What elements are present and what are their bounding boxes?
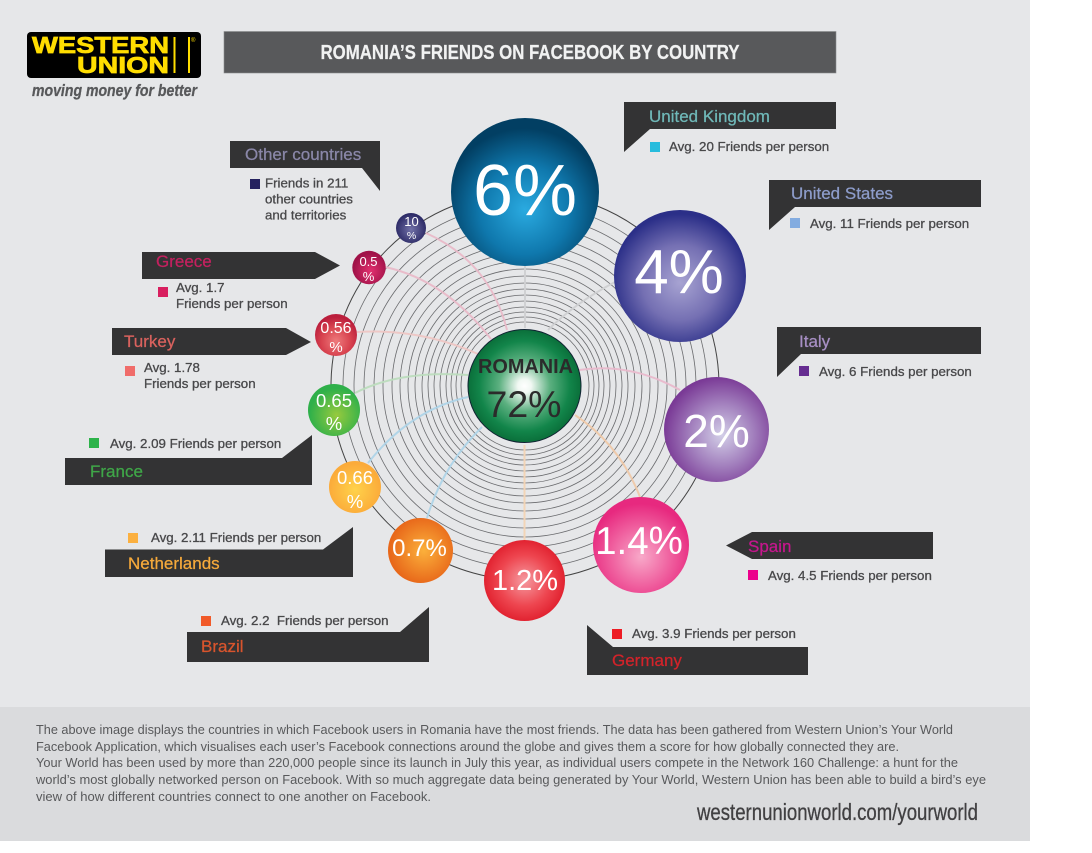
label: Greece bbox=[142, 252, 340, 311]
bubble: Spain 1.4% bbox=[593, 497, 689, 593]
bubble: Other countries 10%: % bbox=[407, 230, 416, 242]
bubble: Italy 2% bbox=[664, 377, 769, 482]
logo: Western Union: WESTERN bbox=[32, 32, 169, 58]
logo tagline: moving money for better bbox=[32, 81, 198, 100]
label: United Kingdom bbox=[624, 102, 836, 154]
footer description text: world’s most globally networked person on Facebook. With so much aggregate data being generated by Your World, Western Union has been able to build a bird’s eye bbox=[35, 772, 986, 787]
label: Italy bbox=[777, 327, 981, 379]
footer description text: The above image displays the countries in which Facebook users in Romania have the most friends. The data has been gathered from Western Union’s Your World bbox=[36, 722, 953, 737]
bubble: United Kingdom 6%: 6% bbox=[473, 151, 577, 231]
bubble: Turkey 0.56%: % bbox=[329, 339, 343, 356]
label: Other countries: and territories bbox=[265, 208, 347, 222]
footer panel bbox=[0, 707, 1030, 841]
label: Germany bbox=[587, 625, 808, 675]
label: Italy: Avg. 6 Friends per person bbox=[819, 364, 972, 379]
label: Germany: Germany bbox=[612, 651, 682, 670]
bubble: Greece 0.5%: % bbox=[363, 269, 375, 284]
label: United States bbox=[769, 180, 981, 231]
label: Brazil: Avg. 2.2 Friends per person bbox=[221, 613, 389, 628]
label: Spain: Avg. 4.5 Friends per person bbox=[768, 568, 932, 583]
label: Other countries bbox=[230, 141, 380, 222]
bubble: Netherlands 0.66%: 0.66 bbox=[337, 467, 373, 488]
label: Other countries: other countries bbox=[265, 192, 353, 206]
footer description text: Your World has been used by more than 220,000 people since its launch in July this year, as individual users compete in the Network 160 Challenge: a hunt for the bbox=[36, 755, 958, 770]
label: United Kingdom: Avg. 20 Friends per person bbox=[669, 139, 829, 154]
label: Netherlands bbox=[105, 527, 353, 577]
label: Netherlands: Avg. 2.11 Friends per person bbox=[151, 530, 321, 545]
bubble: France 0.65%: % bbox=[326, 413, 342, 434]
centre bubble: Romania 72%: 72% bbox=[486, 383, 562, 425]
bubble: Other countries 10% bbox=[396, 213, 426, 243]
label: France: Avg. 2.09 Friends per person bbox=[110, 436, 281, 451]
bubble: United Kingdom 6% bbox=[451, 118, 599, 266]
bubble: Turkey 0.56% bbox=[315, 314, 357, 356]
label: Netherlands: Netherlands bbox=[128, 554, 220, 573]
label: United States: United States bbox=[791, 184, 893, 203]
bubble: Brazil 0.7%: 0.7% bbox=[392, 535, 447, 562]
website url: westernunionworld.com/yourworld bbox=[696, 799, 978, 825]
logo: Western Union bbox=[27, 32, 201, 78]
label: Greece: Greece bbox=[156, 252, 212, 271]
logo: Western Union: ® bbox=[191, 37, 196, 44]
label: Germany: Avg. 3.9 Friends per person bbox=[632, 626, 796, 641]
bubble: Spain 1.4%: 1.4% bbox=[595, 520, 683, 563]
footer description text: view of how different countries connect to one another on Facebook. bbox=[36, 789, 431, 804]
bubble: Italy 2%: 2% bbox=[683, 405, 750, 457]
label: Brazil: Brazil bbox=[201, 637, 244, 656]
footer description text bbox=[35, 722, 986, 804]
label: France: France bbox=[90, 462, 143, 481]
concentric rings chart bbox=[331, 192, 719, 580]
bubble: Netherlands 0.66%: % bbox=[347, 491, 363, 512]
connector lines from Romania to each country bbox=[355, 233, 680, 540]
centre bubble: Romania 72%: ROMANIA bbox=[478, 356, 573, 378]
label: Brazil bbox=[187, 607, 429, 662]
bubble: United States 4% bbox=[614, 210, 746, 342]
label: Turkey bbox=[112, 328, 311, 391]
label: Greece: Friends per person bbox=[176, 296, 288, 311]
bubble: Germany 1.2%: 1.2% bbox=[492, 565, 558, 597]
label: Spain bbox=[726, 532, 933, 583]
background panel bbox=[0, 0, 1030, 707]
label: Turkey: Avg. 1.78 bbox=[144, 360, 200, 375]
bubble: Brazil 0.7% bbox=[388, 518, 453, 583]
bubble: Germany 1.2% bbox=[484, 540, 565, 621]
centre bubble: Romania 72% bbox=[468, 330, 581, 442]
footer description text: Facebook Application, which visualises each user’s Facebook connections around the globe and gives them a score for how globally connected they are. bbox=[36, 739, 899, 754]
label: Other countries: Friends in 211 bbox=[265, 176, 348, 190]
label: Greece: Avg. 1.7 bbox=[176, 280, 225, 295]
bubble: Other countries 10%: 10 bbox=[404, 214, 419, 229]
logo: Western Union: UNION bbox=[77, 52, 169, 78]
label: Other countries: Other countries bbox=[245, 145, 361, 164]
label: Turkey: Friends per person bbox=[144, 376, 256, 391]
bubble: Greece 0.5%: 0.5 bbox=[359, 254, 378, 269]
label: Italy: Italy bbox=[799, 332, 831, 351]
label: Turkey: Turkey bbox=[124, 332, 176, 351]
label: United States: Avg. 11 Friends per person bbox=[810, 216, 969, 231]
bubble: France 0.65% bbox=[308, 384, 360, 436]
bubble: United States 4%: 4% bbox=[634, 238, 724, 307]
bubble: Greece 0.5% bbox=[352, 251, 386, 284]
label: France bbox=[65, 435, 312, 485]
title banner: ROMANIA’S FRIENDS ON FACEBOOK BY COUNTRY bbox=[320, 41, 740, 64]
bubble: Netherlands 0.66% bbox=[329, 461, 381, 513]
bubble: Turkey 0.56%: 0.56 bbox=[320, 320, 352, 337]
label: Spain: Spain bbox=[748, 537, 791, 556]
label: United Kingdom: United Kingdom bbox=[649, 107, 770, 126]
title banner bbox=[224, 32, 836, 73]
bubble: France 0.65%: 0.65 bbox=[316, 390, 352, 411]
